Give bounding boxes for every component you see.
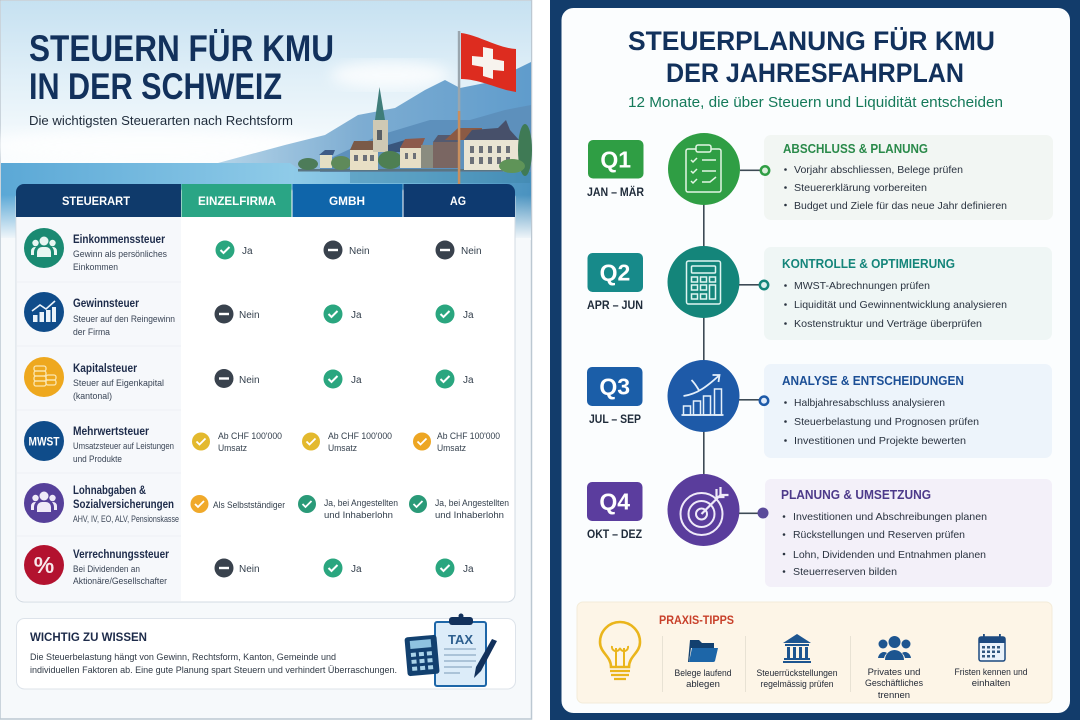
badge Q2 — [588, 253, 643, 292]
row: Gewinnsteuer — [24, 292, 474, 337]
callout: Wichtig zu wissen: Die Steuerbelastung hängt von Gewinn, Rechtsform, Kanton, Gemeinde und — [30, 652, 336, 663]
row: Einkommenssteuer: Einkommen — [73, 262, 118, 272]
panel: Praxis-Tipps — [577, 602, 1052, 703]
row: Gewinnsteuer: der Firma — [73, 327, 110, 337]
row: Verrechnungssteuer: Bei Dividenden an — [73, 564, 140, 574]
row: Verrechnungssteuer: Aktionäre/Gesellschafter — [73, 576, 167, 586]
row: Gewinnsteuer: Nein — [239, 310, 260, 321]
icon: checklist — [668, 133, 740, 205]
row: Mehrwertsteuer: Ab CHF 100'000 — [437, 431, 500, 441]
panel: roadmap card — [562, 8, 1070, 713]
card: Abschluss und Planung: Budget und Ziele für das neue Jahr definieren — [794, 200, 1007, 212]
icon: team — [24, 483, 64, 523]
panel: Praxis-Tipps: PRAXIS-TIPPS — [659, 615, 734, 627]
row: Mehrwertsteuer: und Produkte — [73, 454, 122, 464]
card: Kontrolle und Optimierung: Liquidität und Gewinnentwicklung analysieren — [794, 299, 1007, 311]
row: Kapitalsteuer: Nein — [239, 375, 260, 386]
roadmap title — [628, 26, 995, 88]
card: Kontrolle und Optimierung: Kostenstruktur und Verträge überprüfen — [794, 318, 982, 330]
row: Lohnabgaben und Sozialversicherungen: Ja, bei Angestellten — [324, 498, 398, 508]
row: Gewinnsteuer: Steuer auf den Reingewinn — [73, 314, 175, 324]
title: IN DER SCHWEIZ — [29, 66, 282, 107]
badge Q1: Q1 — [600, 146, 631, 172]
row: Gewinnsteuer: Gewinnsteuer — [73, 298, 139, 310]
icon: tax clipboard, calculator and pen: TAX — [448, 632, 473, 647]
row: Lohnabgaben und Sozialversicherungen: und Inhaberlohn — [324, 510, 393, 520]
row: Kapitalsteuer: Ja — [463, 375, 474, 386]
row: Mehrwertsteuer: Umsatz — [328, 443, 357, 453]
Q4 row — [587, 474, 1052, 587]
tip: Privates und Geschäftliches — [865, 636, 923, 701]
panel: right poster background — [550, 0, 1080, 720]
badge Q4: Q4 — [599, 488, 630, 514]
row: Mehrwertsteuer: Umsatzsteuer auf Leistungen — [73, 441, 174, 451]
table header: AG — [450, 194, 466, 208]
Q1 row — [587, 133, 1053, 220]
row: Kapitalsteuer — [24, 357, 474, 401]
card: Abschluss und Planung: ABSCHLUSS & PLANUNG — [783, 142, 928, 156]
row: Verrechnungssteuer: Verrechnungssteuer — [73, 549, 169, 561]
tip: Fristen: Fristen kennen und — [954, 667, 1028, 678]
card: Kontrolle und Optimierung: MWST-Abrechnungen prüfen — [794, 280, 930, 292]
roadmap title: STEUERPLANUNG FÜR KMU — [628, 26, 995, 56]
card: Abschluss und Planung: Vorjahr abschliessen, Belege prüfen — [794, 164, 963, 176]
subtitle: Die wichtigsten Steuerarten nach Rechtsform — [29, 113, 293, 128]
icon: percent: % — [34, 552, 54, 578]
row: Lohnabgaben und Sozialversicherungen — [24, 483, 509, 524]
row: Mehrwertsteuer: Mehrwertsteuer — [73, 426, 149, 438]
flag of Switzerland — [458, 31, 516, 184]
card: Analyse und Entscheidungen: Halbjahresabschluss analysieren — [794, 397, 945, 409]
row: Kapitalsteuer: (kantonal) — [73, 391, 112, 401]
row: Lohnabgaben und Sozialversicherungen: Lohnabgaben & — [73, 485, 146, 497]
tip: Privates und Geschäftliches: Geschäftliches — [865, 678, 923, 689]
card: Planung und Umsetzung — [765, 479, 1052, 587]
card: Planung und Umsetzung: Steuerreserven bilden — [793, 566, 897, 578]
row: Lohnabgaben und Sozialversicherungen: und Inhaberlohn — [435, 510, 504, 520]
row: Einkommenssteuer: Gewinn als persönliches — [73, 249, 167, 259]
table header: EINZELFIRMA — [198, 194, 276, 208]
tip: Belege: Belege laufend — [674, 668, 732, 679]
row: Kapitalsteuer: Kapitalsteuer — [73, 363, 137, 375]
card: Planung und Umsetzung: Investitionen und Abschreibungen planen — [793, 511, 987, 523]
Q1 row: JAN – MÄR — [587, 186, 645, 199]
row: Kapitalsteuer: Steuer auf Eigenkapital — [73, 378, 164, 388]
row: Verrechnungssteuer: Ja — [463, 564, 474, 575]
connector — [739, 508, 768, 518]
tip: Privates und Geschäftliches: trennen — [878, 690, 910, 701]
town — [298, 87, 532, 183]
callout: Wichtig zu wissen: WICHTIG ZU WISSEN — [30, 630, 147, 644]
badge Q2: Q2 — [600, 260, 630, 286]
card: Kontrolle und Optimierung — [764, 247, 1052, 340]
icon: people — [24, 228, 64, 268]
badge Q3: Q3 — [599, 374, 630, 400]
icon: growth chart — [668, 360, 740, 432]
title — [29, 28, 334, 107]
tip: Fristen: einhalten — [972, 678, 1010, 689]
card: Analyse und Entscheidungen — [764, 364, 1052, 458]
Q3 row: JUL – SEP — [589, 414, 641, 426]
roadmap subtitle: 12 Monate, die über Steuern und Liquidität entscheiden — [628, 94, 1003, 111]
card: Analyse und Entscheidungen: ANALYSE & ENTSCHEIDUNGEN — [782, 374, 964, 388]
icon: target — [668, 474, 740, 546]
row: Lohnabgaben und Sozialversicherungen: Sozialversicherungen — [73, 499, 174, 511]
row: Mehrwertsteuer — [24, 421, 500, 464]
row: Einkommenssteuer — [24, 228, 482, 272]
tip: Steuerrückstellungen: Steuerrückstellungen — [756, 668, 838, 679]
callout: Wichtig zu wissen: individuellen Faktoren ab. Eine gute Planung spart Steuern und verhindert Überraschungen. — [30, 665, 397, 676]
row: Mehrwertsteuer: Ab CHF 100'000 — [218, 431, 282, 441]
connector — [740, 166, 769, 175]
icon: tax clipboard, calculator and pen — [404, 614, 497, 686]
row: Gewinnsteuer: Ja — [351, 310, 362, 321]
callout: Wichtig zu wissen — [16, 614, 516, 689]
Q2 row — [587, 246, 1052, 340]
icon: MWST badge — [24, 421, 64, 461]
icon: light bulb — [600, 622, 640, 679]
row: Mehrwertsteuer: Umsatz — [437, 443, 466, 453]
tip: Belege — [674, 640, 732, 690]
row: Verrechnungssteuer: Ja — [351, 564, 362, 575]
badge Q1 — [588, 140, 644, 178]
tip: Belege: ablegen — [686, 679, 720, 690]
icon: coins — [24, 357, 64, 397]
row: Kapitalsteuer: Ja — [351, 375, 362, 386]
card: Abschluss und Planung: Steuererklärung vorbereiten — [794, 182, 927, 194]
timeline line — [703, 200, 705, 480]
row: Verrechnungssteuer: Nein — [239, 564, 260, 575]
row: Einkommenssteuer: Nein — [461, 246, 482, 257]
row: Gewinnsteuer: Ja — [463, 310, 474, 321]
table header: GMBH — [329, 194, 365, 208]
title: STEUERN FÜR KMU — [29, 28, 334, 69]
icon: percent — [24, 545, 64, 585]
row: Lohnabgaben und Sozialversicherungen: AHV, IV, EO, ALV, Pensionskasse — [73, 514, 179, 524]
icon: rising bars — [24, 292, 64, 332]
Q4 row: OKT – DEZ — [587, 529, 642, 541]
row: Einkommenssteuer: Einkommenssteuer — [73, 234, 165, 246]
landscape background — [0, 1, 532, 240]
tip: Steuerrückstellungen — [756, 634, 838, 690]
tax comparison table — [16, 184, 515, 602]
connector — [739, 396, 768, 405]
connector — [739, 281, 768, 289]
card: Planung und Umsetzung: Lohn, Dividenden und Entnahmen planen — [793, 549, 986, 561]
tip: Steuerrückstellungen: regelmässig prüfen — [760, 679, 834, 690]
Q3 row — [587, 360, 1052, 458]
table header: STEUERART — [62, 194, 131, 208]
card: Abschluss und Planung — [764, 135, 1053, 220]
badge Q4 — [587, 482, 642, 521]
row: Mehrwertsteuer: Ab CHF 100'000 — [328, 431, 392, 441]
row: Einkommenssteuer: Nein — [349, 246, 370, 257]
panel: left poster — [0, 0, 532, 719]
card: Planung und Umsetzung: Rückstellungen und Reserven prüfen — [793, 529, 965, 541]
card: Planung und Umsetzung: PLANUNG & UMSETZUNG — [781, 488, 931, 502]
badge Q3 — [587, 367, 642, 406]
card: Analyse und Entscheidungen: Investitionen und Projekte bewerten — [794, 435, 966, 447]
row: Lohnabgaben und Sozialversicherungen: Als Selbstständiger — [213, 500, 285, 510]
tip: Fristen — [954, 634, 1028, 689]
row: Lohnabgaben und Sozialversicherungen: Ja, bei Angestellten — [435, 498, 509, 508]
table header — [16, 184, 515, 217]
Q2 row: APR – JUN — [587, 300, 643, 312]
card: Analyse und Entscheidungen: Steuerbelastung und Prognosen prüfen — [794, 416, 979, 428]
icon: MWST badge: MWST — [28, 434, 60, 448]
row: Einkommenssteuer: Ja — [242, 246, 253, 257]
roadmap title: DER JAHRESFAHRPLAN — [666, 58, 964, 88]
tip: Privates und Geschäftliches: Privates und — [868, 667, 920, 678]
icon: calculator — [668, 246, 740, 318]
card: Kontrolle und Optimierung: KONTROLLE & OPTIMIERUNG — [782, 257, 955, 271]
row: Verrechnungssteuer — [24, 545, 474, 586]
row: Mehrwertsteuer: Umsatz — [218, 443, 247, 453]
